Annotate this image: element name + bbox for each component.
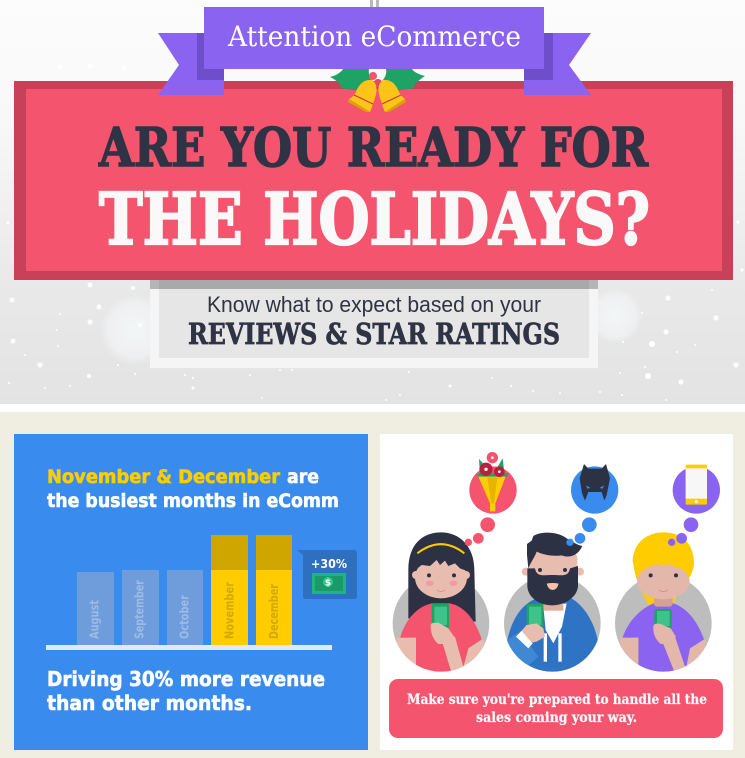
hanger strings <box>370 0 379 8</box>
heading: are <box>287 466 319 488</box>
bar chart: November <box>222 582 236 639</box>
callout: prepared: Make sure you're prepared to handle all the <box>407 692 707 708</box>
bar chart <box>46 535 332 650</box>
icon: holly and bells <box>330 69 425 112</box>
icon: dollar bill: $ <box>325 578 331 588</box>
callout: +30% <box>297 550 357 599</box>
subtitle box <box>150 280 598 368</box>
driving text: than other months. <box>47 691 252 715</box>
header background with snow <box>0 0 745 412</box>
main red banner <box>14 81 733 280</box>
person: bearded man <box>504 533 601 673</box>
bar chart: December <box>267 584 281 639</box>
subtitle line 1: Know what to expect based on your <box>207 292 541 317</box>
person: woman with headband <box>393 532 490 674</box>
bar chart: October <box>178 595 192 639</box>
panel: busiest months <box>14 434 368 750</box>
heading <box>47 466 339 512</box>
illustrations <box>393 452 720 674</box>
person: blonde woman <box>615 532 712 674</box>
callout: +30%: +30% <box>311 556 347 571</box>
bar chart: August <box>88 600 102 639</box>
driving text <box>47 667 325 715</box>
panel: shoppers <box>380 434 733 750</box>
bar chart: September <box>132 580 146 639</box>
page background <box>0 412 745 758</box>
thought bubble: bouquet <box>465 452 517 546</box>
title line 1: ARE YOU READY FOR <box>98 117 649 179</box>
callout: prepared: sales coming your way. <box>476 710 637 726</box>
callout: prepared <box>389 679 723 738</box>
ribbon text: Attention eCommerce <box>227 20 521 53</box>
thought bubble: batman mask <box>566 464 618 546</box>
thought bubble: smartphone <box>668 465 720 546</box>
subtitle line 2: REVIEWS & STAR RATINGS <box>188 317 560 351</box>
driving text: Driving 30% more revenue <box>47 667 325 691</box>
heading: November & December <box>47 466 281 488</box>
ribbon <box>158 7 591 95</box>
heading: the busiest months in eComm <box>47 490 339 512</box>
